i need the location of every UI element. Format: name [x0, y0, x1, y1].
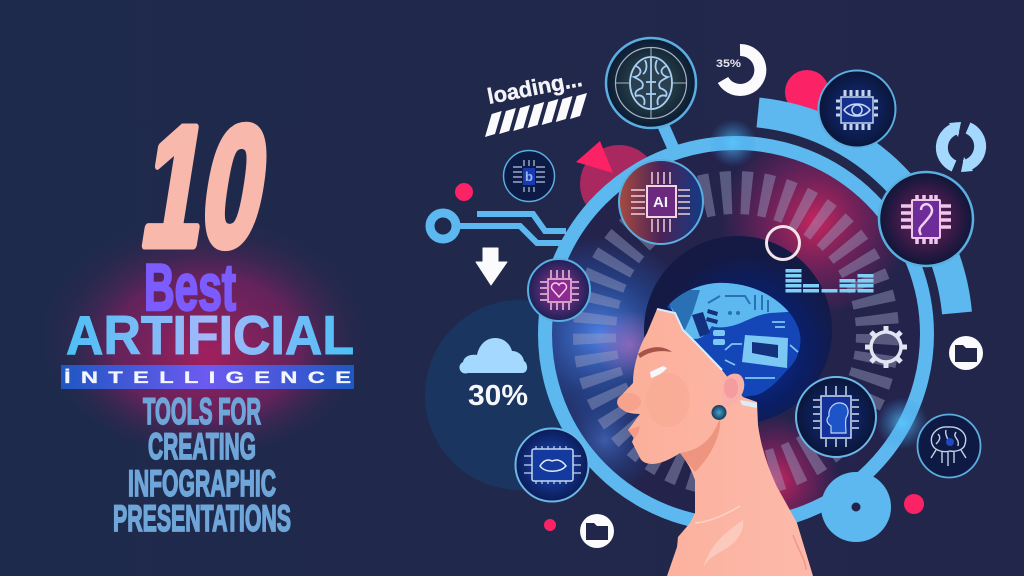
- chip: circuit brain: [918, 414, 980, 478]
- ear: [722, 374, 744, 408]
- word Artificial: ARTIFICIAL: [66, 304, 354, 366]
- subtitle: INFOGRAPHIC: [128, 463, 276, 504]
- loading label: loading...: [485, 66, 584, 109]
- number 10: 10: [132, 92, 280, 282]
- intelligence banner: İNTELLIGENCE: [64, 368, 351, 387]
- chip: small b: [504, 150, 554, 202]
- donut chart 35%: 35%: [716, 58, 741, 70]
- earring: [712, 405, 726, 420]
- white ring: [766, 226, 800, 260]
- central dark disc: [644, 236, 832, 424]
- brain circuit dome: [667, 282, 800, 397]
- chip: small b: b: [525, 169, 533, 184]
- subtitle: PRESENTATIONS: [113, 498, 291, 539]
- icon: cloud: [459, 338, 527, 374]
- circuit connector: [430, 213, 566, 243]
- cheek: [646, 373, 690, 427]
- ring glow right: [876, 397, 928, 449]
- nose shade: [617, 393, 641, 411]
- subtitle: CREATING: [148, 426, 256, 467]
- pink sector behind AI chip: [576, 141, 658, 223]
- icon: gear: [865, 326, 907, 368]
- inner disc: [550, 148, 922, 520]
- lips: [628, 426, 640, 444]
- title glow: [37, 197, 377, 453]
- face and neck: [617, 309, 813, 576]
- cloud backdrop circle: [425, 300, 615, 490]
- pink dot bottom: [544, 519, 556, 531]
- chip: eye: [818, 70, 896, 148]
- shoulder highlight: [703, 520, 743, 568]
- inner glows: [552, 152, 897, 510]
- loading bar: [485, 93, 587, 137]
- main ring: [545, 143, 927, 525]
- icon: folder bottom: [580, 514, 614, 548]
- pink dot left: [455, 183, 473, 201]
- eyebrow: [638, 347, 672, 358]
- chip: AI: [619, 160, 703, 244]
- icon: refresh arrows: [942, 122, 980, 172]
- connector from brain chip: [663, 125, 675, 152]
- chip: ear: [879, 172, 973, 266]
- ring glow top: [709, 119, 757, 167]
- pink circle behind eye chip: [785, 70, 829, 114]
- outer arc: [758, 112, 957, 313]
- equalizer: [794, 268, 866, 292]
- donut chart 35%: [716, 50, 760, 90]
- jaw shadow: [680, 418, 720, 472]
- chip: heart: [528, 259, 590, 321]
- icon: folder right: [949, 336, 983, 370]
- chip: AI: AI: [653, 194, 668, 211]
- subtitle: TOOLS FOR: [143, 391, 261, 432]
- chip: head profile: [796, 377, 876, 457]
- hairline edge: [657, 309, 722, 370]
- neck highlights: [695, 506, 806, 570]
- word Best: Best: [144, 250, 236, 324]
- label 30%: 30%: [468, 380, 528, 412]
- big ring node: [821, 472, 891, 542]
- head and neck figure: [617, 280, 813, 576]
- title block: [61, 92, 354, 539]
- chip: lips: [516, 428, 588, 502]
- pink dot right: [904, 494, 924, 514]
- subtitle: [113, 391, 291, 539]
- icon: down arrow: [476, 248, 507, 285]
- eye: [650, 366, 667, 378]
- collar: [740, 400, 757, 408]
- radial tick marks: [594, 192, 878, 476]
- chip: brain target: [606, 38, 696, 128]
